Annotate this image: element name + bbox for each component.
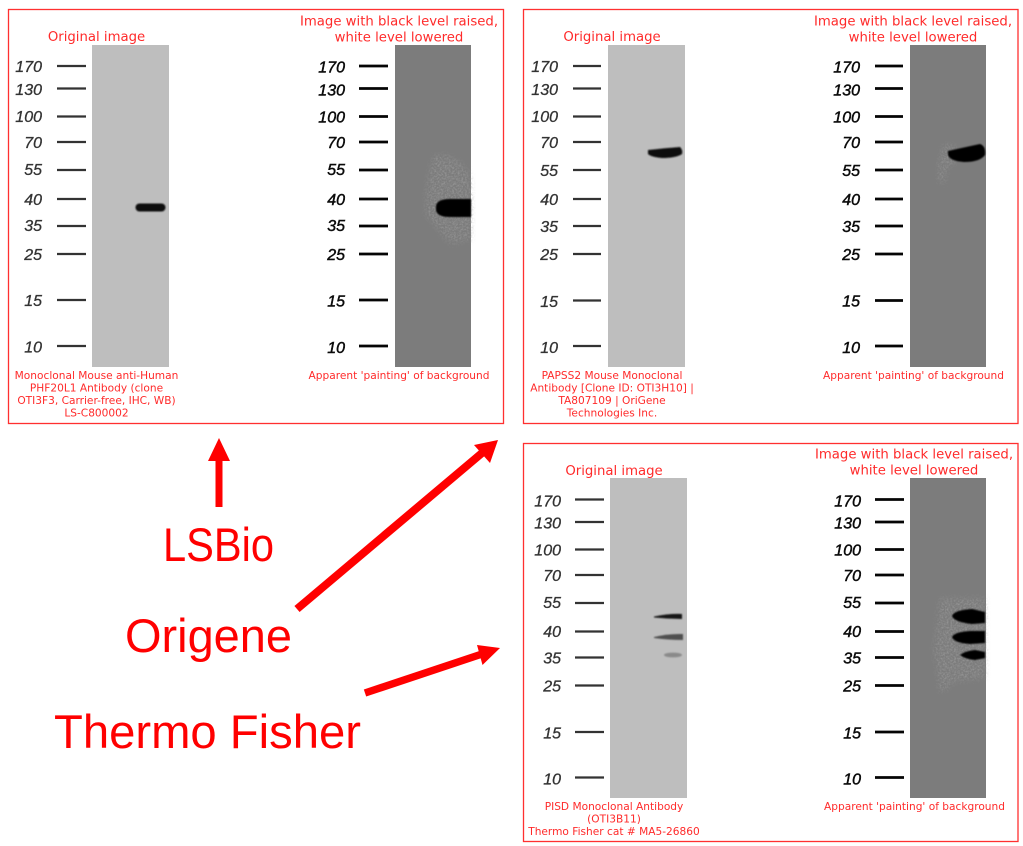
- heading: original image: Original image: [48, 30, 145, 45]
- ladder labels: original: 170: [15, 59, 42, 76]
- ladder labels: original: 70: [24, 135, 42, 152]
- ladder labels: original: 35: [543, 650, 561, 668]
- ladder labels: original: 130: [15, 82, 42, 99]
- ladder labels: original: 15: [24, 293, 42, 310]
- arrow: LSBio: [208, 438, 230, 507]
- ladder labels: original: 55: [543, 595, 561, 612]
- caption: Thermo Fisher product: (OTI3B11): [587, 814, 641, 826]
- ladder labels: original: 70: [540, 135, 558, 152]
- ladder labels: enhanced: 40: [843, 624, 861, 641]
- ladder labels: enhanced: [834, 494, 904, 788]
- ladder labels: original: 55: [24, 162, 42, 179]
- ladder labels: original: 10: [543, 772, 561, 788]
- ladder labels: original: 170: [531, 59, 558, 76]
- caption: painting: Apparent 'painting' of background: [824, 801, 1005, 813]
- ladder labels: enhanced: 25: [841, 247, 860, 264]
- ladder labels: enhanced: 55: [842, 163, 860, 180]
- panel: LSBio: [8, 10, 504, 424]
- caption: LSBio product: LS-C800002: [64, 408, 129, 420]
- ladder labels: enhanced: 70: [843, 568, 861, 585]
- ladder labels: original: 35: [540, 219, 558, 236]
- ladder labels: original: 130: [534, 516, 561, 532]
- enhanced blot lane: [910, 45, 986, 367]
- ladder labels: enhanced: 40: [842, 192, 860, 209]
- caption: Origene product: PAPSS2 Mouse Monoclonal: [542, 370, 682, 382]
- ladder labels: enhanced: 70: [327, 135, 345, 152]
- ladder labels: enhanced: 15: [843, 726, 861, 742]
- ladder labels: enhanced: 100: [833, 110, 860, 126]
- label: LSBio: LSBio: [163, 518, 274, 571]
- panel: Origene: [524, 10, 1018, 424]
- ladder labels: original: 70: [543, 568, 561, 585]
- ladder labels: original: 170: [534, 494, 561, 510]
- heading: black level raised: white level lowered: [850, 464, 978, 478]
- caption: painting: Apparent 'painting' of background: [823, 370, 1004, 382]
- ladder labels: enhanced: 35: [842, 219, 860, 236]
- enhanced blot lane: [395, 45, 471, 367]
- ladder labels: enhanced: 100: [318, 110, 345, 126]
- ladder labels: enhanced: 15: [327, 294, 345, 310]
- ladder labels: enhanced: 55: [327, 162, 345, 179]
- ladder labels: original: 10: [540, 340, 558, 357]
- caption: Origene product: TA807109 | OriGene: [557, 395, 666, 407]
- heading: black level raised: white level lowered: [849, 30, 977, 46]
- heading: black level raised: Image with black level raised,: [300, 14, 498, 30]
- label: Origene: Origene: [125, 609, 292, 662]
- ladder labels: original: 40: [540, 192, 558, 209]
- panel: Thermo Fisher: [524, 444, 1018, 842]
- ladder labels: enhanced: 10: [842, 340, 860, 357]
- caption: Thermo Fisher product: Thermo Fisher cat # MA5-26860: [527, 826, 700, 838]
- ladder labels: original: 25: [23, 247, 42, 264]
- ladder labels: original: 130: [531, 82, 558, 99]
- ladder labels: original: 15: [543, 726, 561, 742]
- ladder labels: original: 35: [24, 218, 42, 235]
- caption: LSBio product: OTI3F3, Carrier-free, IHC, WB): [17, 395, 176, 407]
- ladder labels: enhanced: 35: [327, 218, 345, 235]
- caption: Thermo Fisher product: PISD Monoclonal Antibody: [545, 801, 683, 813]
- ladder labels: enhanced: 170: [834, 494, 861, 510]
- caption: LSBio product: PHF20L1 Antibody (clone: [30, 382, 163, 394]
- ladder labels: original: 100: [15, 109, 42, 126]
- ladder labels: enhanced: [833, 60, 903, 357]
- caption: Origene product: Antibody [Clone ID: OTI3H10] |: [530, 382, 694, 394]
- ladder labels: original: [531, 59, 601, 357]
- original blot lane: [92, 45, 169, 367]
- ladder labels: enhanced: 100: [834, 542, 861, 560]
- enhanced blot lane: [910, 478, 986, 798]
- ladder labels: enhanced: [318, 60, 388, 357]
- ladder labels: original: [15, 59, 86, 356]
- ladder labels: original: 25: [542, 678, 561, 696]
- arrow: Origene: [297, 440, 498, 609]
- ladder labels: enhanced: 25: [326, 247, 345, 264]
- caption: painting: Apparent 'painting' of background: [309, 370, 489, 382]
- ladder labels: original: [534, 494, 604, 788]
- caption: Origene product: Technologies Inc.: [566, 408, 657, 420]
- heading: black level raised: Image with black level raised,: [815, 448, 1013, 462]
- ladder labels: original: 40: [543, 624, 561, 641]
- ladder labels: enhanced: 10: [327, 340, 345, 357]
- original blot lane: [608, 45, 685, 367]
- ladder labels: original: 100: [531, 109, 558, 126]
- ladder labels: original: 15: [540, 294, 558, 311]
- ladder labels: original: 40: [24, 192, 42, 209]
- heading: black level raised: white level lowered: [335, 30, 463, 46]
- ladder labels: original: 25: [539, 247, 558, 264]
- ladder labels: enhanced: 25: [842, 678, 861, 696]
- heading: black level raised: Image with black level raised,: [814, 14, 1012, 30]
- ladder labels: enhanced: 130: [834, 516, 861, 532]
- ladder labels: enhanced: 35: [843, 650, 861, 668]
- ladder labels: original: 55: [540, 163, 558, 180]
- caption: LSBio product: Monoclonal Mouse anti-Human: [15, 370, 178, 382]
- ladder labels: enhanced: 130: [833, 82, 860, 100]
- ladder labels: enhanced: 70: [842, 135, 860, 152]
- label: Thermo Fisher: Thermo Fisher: [54, 705, 361, 758]
- ladder labels: enhanced: 130: [318, 82, 345, 100]
- ladder labels: enhanced: 40: [327, 192, 345, 209]
- original blot lane: [610, 478, 687, 798]
- heading: original image: Original image: [565, 464, 663, 479]
- ladder labels: enhanced: 15: [842, 294, 860, 310]
- ladder labels: original: 10: [24, 340, 42, 356]
- ladder labels: enhanced: 170: [318, 60, 345, 76]
- arrow: Thermo Fisher: [365, 645, 500, 693]
- ladder labels: enhanced: 10: [843, 772, 861, 788]
- ladder labels: enhanced: 55: [843, 595, 861, 612]
- ladder labels: original: 100: [534, 542, 561, 560]
- heading: original image: Original image: [563, 30, 661, 45]
- ladder labels: enhanced: 170: [833, 60, 860, 76]
